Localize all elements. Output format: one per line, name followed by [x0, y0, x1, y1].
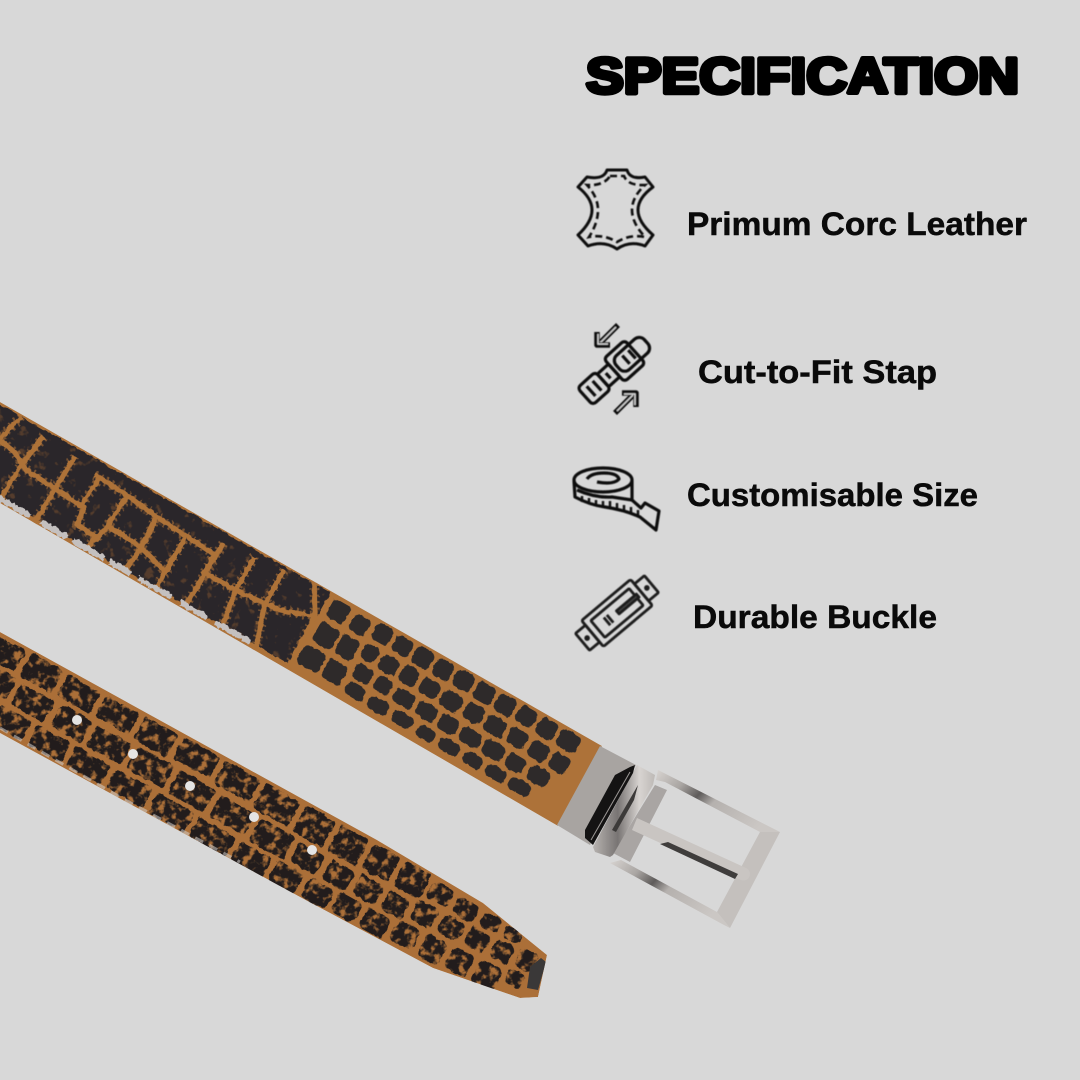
spec label: buckle: Durable Buckle	[693, 599, 937, 635]
spec label: leather: Primum Corc Leather	[687, 206, 1027, 242]
spec label: strap: Cut-to-Fit Stap	[698, 354, 937, 390]
spec label: size: Customisable Size	[687, 477, 978, 513]
icon: leather hide	[578, 170, 653, 249]
belt holes	[72, 715, 317, 855]
belt strap: lower section with punched holes and tip	[0, 632, 550, 1016]
belt strap: upper section with crocodile texture	[0, 397, 602, 826]
icon: buckle	[572, 571, 662, 655]
icon: measuring tape	[574, 468, 659, 530]
metal buckle	[557, 746, 780, 928]
icon: cut-to-fit strap	[575, 325, 656, 413]
title: SPECIFICATION	[586, 48, 1019, 104]
